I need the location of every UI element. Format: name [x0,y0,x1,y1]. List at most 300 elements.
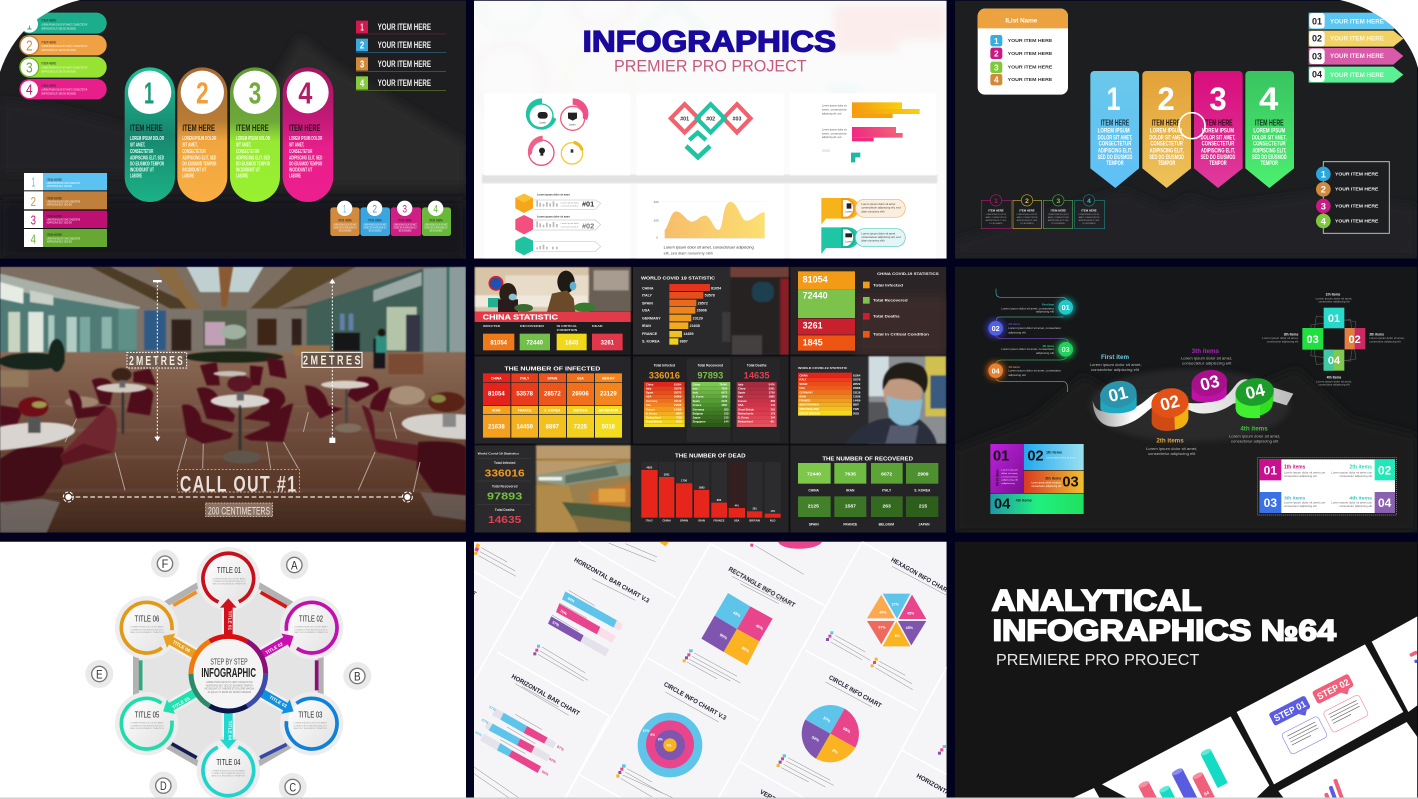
cell: number of infected table: 21638 [488,424,505,430]
bottom-left banded list: 1 [31,175,35,190]
cell: total infected recovered deaths: 81054 [674,382,682,386]
cell: number of recovered blocks: IRAN [846,489,855,493]
cell: total infected recovered deaths: 860 [771,399,776,403]
bordered white block bottom-right: Lorem ipsum dolor sit amet cun [1331,501,1373,505]
arrow tags: LOREM IPSUM [1098,128,1130,135]
cell: number of infected table: 5018 [602,424,616,430]
title circles: TITLE 05 [135,709,160,719]
cell: number of dead bar chart: 179 [770,509,775,513]
horizontal bar chart v3: 57% [552,620,560,628]
rectangle info chart: 85% [741,645,751,654]
top-right ribbons [1309,13,1403,83]
bordered white block bottom-right: 03 [1264,496,1277,510]
square diamond diagram: 3th items [1284,332,1298,336]
bottom-left banded list: LOREM IPSUM DOLOR SIT AMET, CONSECTETUR [47,182,80,185]
diamond steps card: #02 [706,116,715,122]
horizontal bars card: amet, consectetur [822,108,847,111]
step speech bubbles [1268,673,1369,755]
big numbered pills: DO EIUSMOD TEMPOR [130,162,164,168]
gradient blocks bottom-left: First item [996,469,1000,486]
top-right numbered list: YOUR ITEM HERE [378,40,431,50]
cell: number of dead bar chart: SPAIN [680,518,688,522]
top-left pill list: ADIPISCING ELIT, SED DO EIUSMOD [41,26,77,30]
cell: number of dead bar chart: 860 [717,498,722,502]
bordered white block bottom-right: 02 [1378,464,1392,478]
tilted white slides [1073,616,1417,798]
cell: china statistic: INFECTED [483,324,501,328]
cell: number of infected table [475,356,631,444]
step speech bubbles: STEP 02 [1316,677,1351,702]
big numbered pills: SIT AMET, [289,142,305,148]
cell: total infected recovered deaths: 5476 [769,382,775,386]
bottom-left outline cards: ITEM HERE [988,208,1004,212]
speech callouts card: diam nonummy nibh [861,211,885,213]
bottom-left outline cards: ITEM HERE [1019,208,1035,212]
ring icons card [526,98,588,165]
big numbered pills: DO EIUSMOD TEMPOR [182,162,216,168]
horizontal bar chart: 37% [488,705,497,713]
bottom-left outline cards: 4 [1087,198,1091,205]
main call out label: CALL OUT #1 [180,472,297,497]
cell: total infected recovered deaths: 336016 [649,370,680,380]
top-right numbered list: YOUR ITEM HERE [378,22,431,32]
bordered white block bottom-right: Lorem ipsum dolor sit amet cun [1331,471,1373,475]
horizontal bar chart v3: 75% [559,609,568,617]
cell: man with mask and table: 81054 [853,373,861,377]
arrow tags: ITEM HERE [1152,117,1181,127]
horizontal bar chart: 67% [481,718,490,726]
area chart card: Lorem ipsum dolor sit amet, consectetuer adipiscing [664,246,754,250]
cell: man with mask and table: WORLD COVID-19 STATISTIC [798,366,848,370]
arrows from centre: TITLE 05 [171,696,191,710]
square diamond diagram: Lorem ipsum dolor sit amet, [1369,337,1405,340]
cell: china statistic: CHINA STATISTIC [483,312,559,321]
horizontal bar chart v3 [533,557,651,681]
title circles: LOREM IPSUM DOLOR SIT AMET [212,577,247,580]
arrow tags: 2 [1157,81,1175,117]
gradient blocks bottom-left: 1th items [1046,450,1062,454]
bottom-left outline cards: AMET, CONSECTETUR [1079,216,1100,219]
top-right numbered list: 3 [360,60,365,71]
centre circle: STEP BY STEP [210,656,248,666]
cell: total infected recovered deaths: Iran [738,395,743,399]
cell: total infected recovered deaths: USA [738,403,744,407]
panel: covid statistics grid [474,267,947,533]
cell: total infected recovered deaths: 7225 [676,416,682,420]
hexagon info chart: 45% [907,611,915,615]
cell: number of infected table: CHINA [491,376,502,380]
title circles: SED DO EIUSMOD TEMPOR [212,584,246,586]
cell: number of dead bar chart: 441 [734,503,739,507]
top-right ribbons: 03 [1312,51,1322,61]
top-left pill list: 4 [26,83,33,99]
cell: man with mask and table: ITALY [799,378,807,382]
cell: china stacked blocks: Total Deaths [873,315,900,319]
cell: total infected recovered deaths: 179 [771,411,776,415]
cell: world covid bar list: S. KOREA [642,340,660,344]
bottom-left banded list: ITEM HERE [47,214,62,218]
list box [978,9,1068,95]
square diamond diagram: consectetur adipiscing elit [1318,384,1350,387]
neon timeline: Lorem ipsum dolor sit amet, consectetur [1001,306,1054,310]
cell: total infected recovered deaths: Total Deaths [747,363,767,367]
bordered white block bottom-right: 3th items [1284,495,1306,501]
cell: man with mask and table: FRANCE [799,399,811,403]
cell: world totals over mall photo: 14635 [488,515,522,526]
arrows from centre: TITLE 06 [172,639,191,654]
arrows from centre: TITLE 03 [268,695,288,709]
horizontal bar chart v3: HORIZONTAL BAR CHART V.3 [573,557,651,605]
cell: total infected recovered deaths: 14459 [674,407,682,411]
title circles: LOREM IPSUM DOLOR SIT AMET [212,769,246,772]
cell: number of recovered blocks: FRANCE [843,522,858,526]
rectangle info chart: 45% [732,610,742,618]
bottom-right small cards: LOREM IPSUM DOLOR SIT AMET [333,223,357,226]
photo: cafe interior [0,267,466,533]
cell: total infected recovered deaths: 1685 [769,395,775,399]
bottom-right small cards: ITEM HERE [338,219,353,223]
arrow tags: SED DO EIUSMOD [1149,154,1184,161]
cell: total infected recovered deaths: Spain [738,391,746,395]
square diamond diagram: 1th items [1326,293,1340,297]
arrow tags: ADIPISCING ELIT, [1252,147,1286,154]
speech callouts card: diam nonummy nibh [861,241,885,243]
arrow tags: CONSECTETUR [1150,141,1183,148]
gradient blocks bottom-left: 01 [993,449,1009,465]
cell: total infected recovered deaths: Belgium [693,411,704,415]
title circles: SED DO EIUSMOD TEMPOR [294,632,328,634]
bottom-right small cards: ITEM HERE [368,219,383,223]
arrow tags: DOLOR SIT AMET, [1149,134,1184,141]
bordered white block bottom-right [1258,458,1396,515]
bottom-right framed list: 3 [1321,201,1326,211]
gradient blocks bottom-left: Lorem ipsum dolor sit amet, [1046,457,1076,460]
bottom-left outline cards: AMET, CONSECTETUR [986,216,1007,219]
horizontal bars card: Lorem ipsum dolor sit [822,129,847,132]
cell: number of infected table: SPAIN [547,376,558,380]
hexagon info chart: 45% [879,611,887,615]
cell: total infected recovered deaths: 104 [771,416,776,420]
gradient blocks bottom-left [990,444,1084,514]
cell: total infected recovered deaths [633,356,789,444]
arrow tags: TEMPOR [1261,160,1278,167]
cell: total infected recovered deaths: 6072 [721,391,728,395]
cell: total infected recovered deaths: USA [646,395,652,399]
gradient blocks bottom-left: consectetur [1001,475,1019,478]
arrows from centre: TITLE 01 [227,611,232,630]
stray card fragments [465,542,822,597]
area chart card: 200 [654,218,659,222]
bottom-left outline cards: 3 [1056,198,1060,205]
bottom-left banded list: ADIPISCING ELIT, SED DO [47,204,72,207]
title circles: CONSECTETUR ADIPISCING ELIT [212,772,246,775]
list box: YOUR ITEM HERE [1008,51,1053,57]
horizontal bars card: adipiscing elit, sed [822,112,842,115]
cell: number of recovered blocks: ITALY [882,489,892,493]
letter badges: B [354,669,361,683]
cell: number of infected table: IRAN [492,408,501,412]
bottom-left banded list: ADIPISCING ELIT, SED DO [47,240,72,243]
bottom-left banded list: ITEM HERE [47,233,62,237]
arrow tags: DOLOR SIT AMET, [1098,134,1132,141]
square diamond diagram: 01 [1328,313,1340,325]
horizontal bar chart v3: 84% [567,596,576,604]
cell: china stacked blocks: 3261 [803,320,823,330]
square diamond diagram: consectetur adipiscing elit [1318,300,1350,303]
neon timeline: Lorem ipsum dolor sit amet, consectetur [1008,369,1061,373]
big numbered pills: INCIDIDUNT UT [236,168,260,174]
bottom-right small cards: SED DO EIUSMOD [369,230,382,232]
speech callouts card: Lorem [845,241,852,244]
top-right numbered list: 2 [360,41,365,52]
cell: total infected recovered deaths: Great Britain [738,407,754,411]
top-right ribbons: 01 [1312,16,1322,26]
neon timeline: 4th items [1042,344,1055,348]
cell: world covid bar list: WORLD COVID 19 STATISTIC [641,276,716,281]
bottom-right small cards: CONSECTETUR ADIPISCING ELIT [333,226,357,229]
diamond steps card: #01 [680,116,689,122]
cell: number of dead bar chart: 281 [752,507,757,511]
big numbered pills: ADIPISCING ELIT, SED [236,156,270,162]
cell: man with mask and table: 7225 [853,407,859,411]
square diamond diagram: consectetur adipiscing elit [1369,340,1401,343]
cell: man with mask and table: 5018 [853,411,859,415]
bottom-left outline cards: ADIPISCING ELIT, SED [986,219,1007,222]
speech callouts card: Lorem [845,211,852,214]
arrow tags: TEMPOR [1158,160,1176,167]
cell: number of recovered blocks: 7635 [845,472,856,478]
cell: total infected recovered deaths: 441 [771,403,776,407]
bottom-right small cards: CONSECTETUR ADIPISCING ELIT [393,226,417,229]
cell: man with mask and table: SWITHERLAND [799,407,819,411]
top-right numbered list: 1 [360,23,364,34]
rectangle info chart [683,566,796,683]
next slide fragments [1321,650,1418,799]
cell: number of recovered blocks: 215 [919,504,927,510]
title circles: LOREM IPSUM DOLOR SIT AMET [130,722,165,725]
headline: INFOGRAPHICS №64 [993,614,1337,647]
neon timeline [986,289,1075,392]
title circles: CONSECTETUR ADIPISCING ELIT [130,628,164,631]
cell: total infected recovered deaths: France [646,407,655,411]
cell: total infected recovered deaths: Italy [646,386,652,390]
ring icons card: Lorem [569,123,576,126]
cell: world covid bar list: 23129 [693,316,703,320]
arrow tags: ITEM HERE [1204,117,1233,127]
speech callouts card: Lorem ipsum dolor sit amet [861,203,896,206]
cell: china statistic: IN CRITICAL [557,324,578,328]
cell: total infected recovered deaths: France [738,399,747,403]
rectangle info chart: RECTANGLE INFO CHART [727,566,796,609]
big numbered pills: DO EIUSMOD TEMPOR [289,162,322,168]
cell: man with mask and table: GREAT BRITAIN [799,411,820,415]
top-right ribbons: 02 [1312,34,1322,44]
title circles: TITLE 04 [216,757,241,767]
title circles: CONSECTETUR ADIPISCING ELIT [294,724,328,727]
top-left pill list: 1 [27,17,32,33]
title circles: CONSECTETUR ADIPISCING ELIT [294,628,328,631]
label 2 metres left: 2METRES [129,355,185,368]
big numbered pills: LABORE [236,174,248,180]
gradient blocks bottom-left: consectetur adipiscing elit [1031,485,1062,488]
panel: analytical infographics title slide [955,542,1418,799]
cell: number of infected table: ITALY [520,376,530,380]
cell: world covid bar list: IRAN [642,324,651,328]
top-right ribbons: YOUR ITEM HERE [1330,72,1385,79]
cell: number of infected table: GER-NY [602,376,616,380]
cell: total infected recovered deaths: 98 [771,420,774,424]
big numbered pills: LABORE [289,174,301,180]
cell: number of infected table: 53578 [516,392,534,398]
cell: number of recovered blocks: S. KOREA [914,489,931,493]
cell: number of infected table: USA [577,376,584,380]
bottom-right small cards: 3 [402,203,407,215]
arrow tags: LOREM IPSUM [1253,128,1285,135]
stray card fragments: ART [465,587,477,597]
cell: number of dead bar chart [632,445,789,533]
bottom-right framed list [1316,162,1389,233]
bottom-right small cards: SED DO EIUSMOD [339,230,352,232]
big numbered pills: LOREM IPSUM DOLOR [289,136,322,142]
speech callouts card: consectetuer adipiscing elit, sed [861,236,901,239]
neon timeline: adipiscing elit [1008,373,1026,377]
cell: number of recovered blocks: JAPAN [918,522,930,526]
neon timeline: 02 [992,324,1000,333]
bottom-left outline cards: DO EIUSMOD [1020,223,1034,225]
cell: total infected recovered deaths: 23129 [674,399,682,403]
top-left pill list: ITEM HERE [41,40,57,44]
cell: world covid bar list [633,267,789,355]
cell: total infected recovered deaths: 263 [724,407,729,411]
panel: tilted info chart slides [465,542,954,799]
arrow tags: 4 [1259,81,1279,117]
top-left pill list: LOREM IPSUM DOLOR SIT AMET, CONSECTETUR [41,22,88,26]
list box: YOUR ITEM HERE [1008,77,1053,83]
bordered white block bottom-right: consectetur adipiscing elit [1284,474,1317,478]
cell: total infected recovered deaths: Total Infected [654,363,675,367]
panel: colourful pill infographic template [0,0,466,259]
cell: number of dead bar chart: THE NUMBER OF DEAD [675,453,746,459]
cell: total infected recovered deaths: 14635 [744,370,770,380]
bordered white block bottom-right: consectetur adipiscing elit [1339,474,1372,478]
cell: total infected recovered deaths: S. Korea [693,395,704,399]
bordered white block bottom-right: 1th items [1284,465,1305,471]
ribbon step labels [1090,349,1280,456]
bottom-right small cards: ITEM HERE [429,219,444,223]
cell: man with mask and table: SOUTH KOREA [799,403,819,407]
gradient blocks bottom-left: 04 [994,496,1011,512]
cell: number of dead bar chart: CHINA [662,518,671,522]
gradient blocks bottom-left: 02 [1027,448,1044,464]
neon timeline: 01 [1062,303,1070,312]
arrows from centre: TITLE 04 [227,721,232,740]
square diamond diagram: Lorem ipsum dolor sit amet, [1316,380,1352,383]
bottom-right small cards: LOREM IPSUM DOLOR SIT AMET [424,223,448,226]
ribbon step labels: 2th items [1156,439,1184,445]
cell: total infected recovered deaths: Italy [693,391,699,395]
bottom-left outline cards: ITEM HERE [1051,208,1066,212]
top-right ribbons: YOUR ITEM HERE [1330,36,1385,43]
horizontal bar chart: HORIZONTAL BAR CHART [510,673,581,718]
letter badges: C [289,780,296,794]
square diamond diagram [1262,293,1405,387]
200 centimeters label [206,503,273,517]
bottom-left banded list: 2 [31,194,36,209]
neon timeline: 2th items [1008,322,1021,326]
title circles: SED DO EIUSMOD TEMPOR [130,632,164,634]
title circles: TITLE 06 [135,613,160,623]
big numbered pills [125,67,333,202]
bordered white block bottom-right: 4th items [1349,495,1372,501]
cell: number of recovered blocks: 2125 [808,504,819,510]
cell: world covid bar list: 14459 [683,332,694,336]
area chart card: 0 [656,236,658,240]
bottom-right small cards: CONSECTETUR ADIPISCING ELIT [363,226,387,229]
horizontal bar chart: 67% [556,745,565,752]
bottom-right small cards [330,201,451,236]
cell: china statistic: 81054 [490,341,508,347]
ribbon step labels: consectetur adipiscing elit [1091,367,1140,372]
hexagon steps card: consectetur [561,205,579,208]
arrow tags: DOLOR SIT AMET, [1252,134,1287,141]
bottom-left outline cards: ITEM HERE [1081,208,1097,212]
big numbered pills: ITEM HERE [289,123,320,133]
panel: infographics premier pro project title slide [472,0,947,259]
square diamond diagram: 03 [1307,334,1319,346]
subheading: PREMIERE PRO PROJECT [996,652,1200,669]
cell: china stacked blocks: Total Infected [873,283,903,287]
cell: number of dead bar chart: FRANCE [713,518,725,522]
circle info chart v3: 8% [667,743,672,747]
cell: world totals over mall photo: 336016 [485,468,525,479]
cell: total infected recovered deaths: 281 [771,407,776,411]
speech callouts card: consectetuer adipiscing elit, sed [861,207,901,210]
cell: total infected recovered deaths: 5018 [676,420,682,424]
3D ribbon with cylinders: 02 [1158,391,1182,415]
cell: number of recovered blocks: 263 [882,504,891,510]
horizontal bars card: Lorem ipsum dolor sit [822,105,847,108]
cell: total infected recovered deaths: China [646,382,654,386]
cell: total infected recovered deaths: 1587 [721,403,728,407]
cell: china stacked blocks [790,267,946,355]
cell: world totals over mall photo: Total Deaths [495,508,515,512]
neon timeline: First Item [1042,303,1055,307]
bottom-left outline cards: 1 [994,198,998,205]
cell: total infected recovered deaths: China [693,382,701,386]
arrow tags: 1 [1107,81,1121,117]
bottom-right framed list: 2 [1321,185,1326,195]
cell: number of dead bar chart: BRITAIN [749,518,760,522]
horizontal bar chart: 64% [548,757,557,765]
cell: number of recovered blocks: 72440 [807,472,821,478]
cell: total infected recovered deaths: 215 [724,411,729,415]
bordered white block bottom-right: 01 [1264,464,1277,478]
bordered white block bottom-right: consectetur adipiscing elit [1339,504,1372,508]
title circles: SED DO EIUSMOD TEMPOR [130,728,164,730]
area chart card: elit, sed diam nonummy nibh [664,251,713,255]
neon timeline: adipiscing elit [1036,310,1054,314]
hexagon steps card: #01 [582,200,594,209]
title circles [111,545,347,799]
gradient blocks bottom-left: 4th items [1016,498,1032,502]
cell: number of recovered blocks: 2909 [917,472,929,478]
arrows from centre: TITLE 02 [265,641,284,655]
square diamond diagram: 4th items [1327,375,1341,379]
big numbered pills: CONSECTETUR [182,149,206,155]
big numbered pills: LABORE [130,174,142,180]
arrow tags: CONSECTETUR [1253,141,1286,148]
headline: ANALYTICAL [992,584,1202,617]
